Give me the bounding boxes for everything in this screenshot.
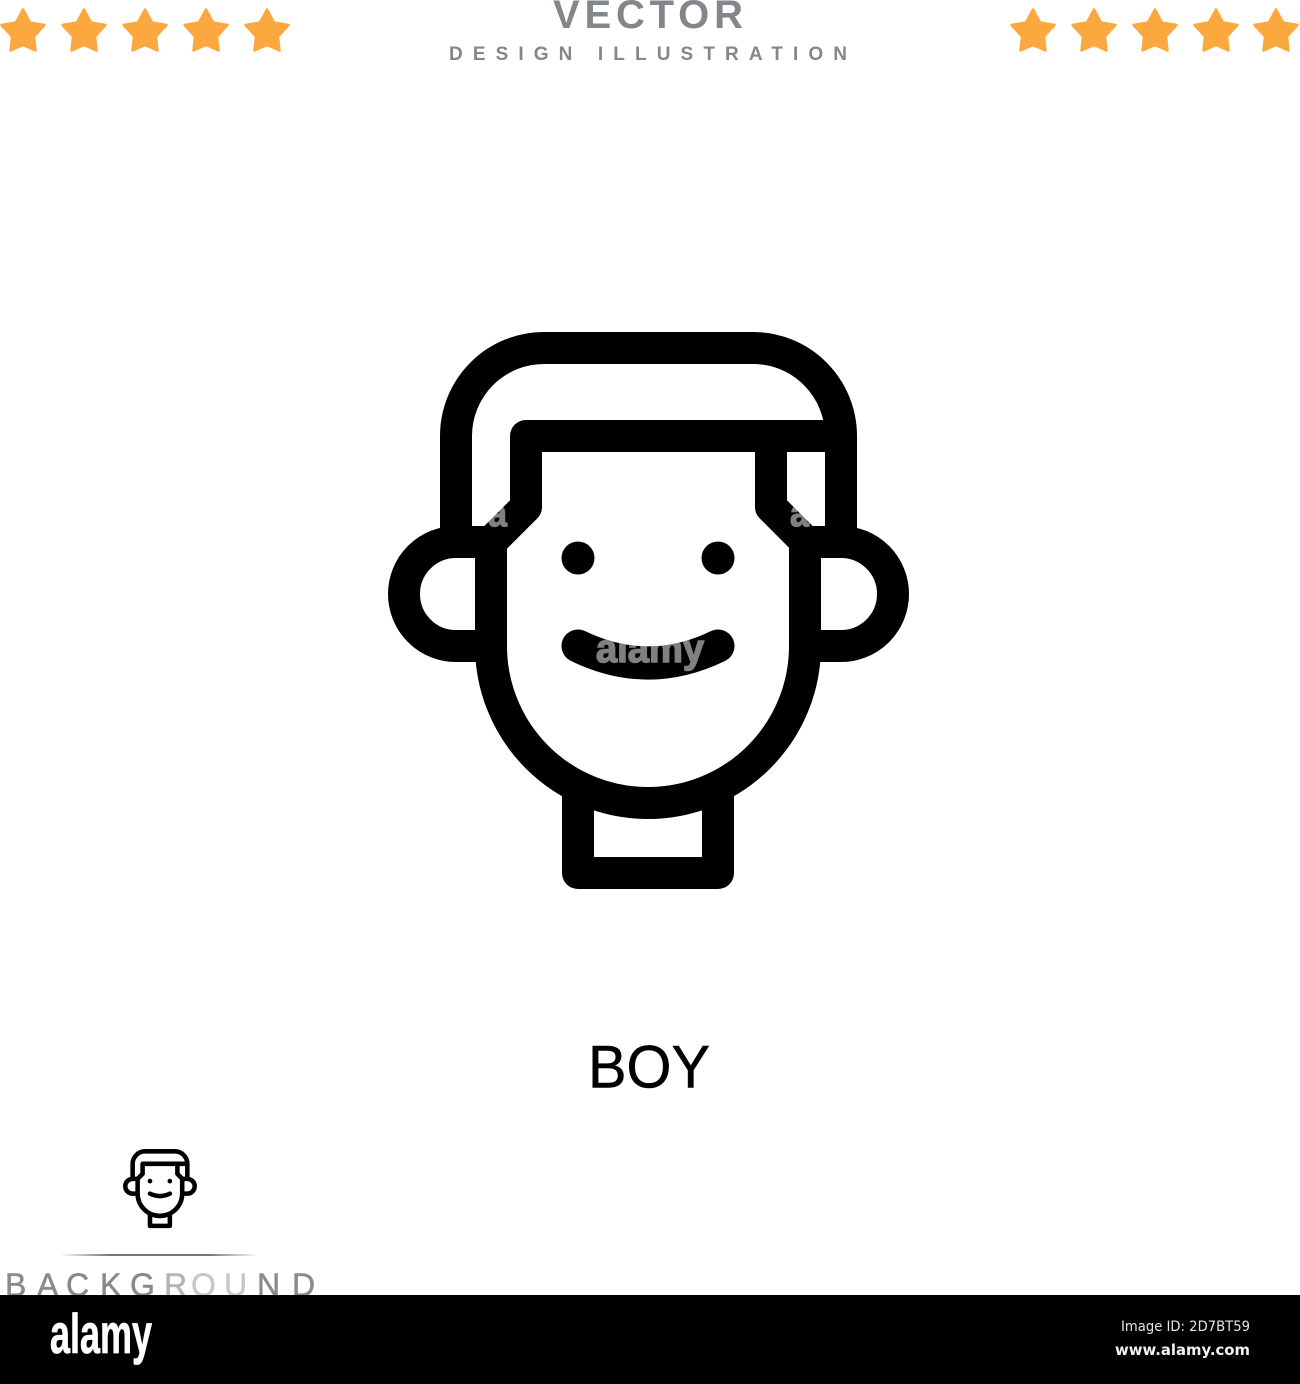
footer text: website: www.alamy.com	[1115, 1341, 1250, 1359]
right eye	[702, 542, 734, 574]
divider line	[60, 1254, 258, 1256]
footer bar	[0, 1295, 1300, 1384]
icon: boy face, small	[125, 1151, 195, 1226]
left ear	[404, 542, 491, 646]
watermark: letter a at right fringe: a	[790, 493, 810, 535]
stars: top right rating	[1012, 10, 1298, 50]
left eye	[562, 542, 594, 574]
face outline	[491, 540, 805, 803]
footer logo: alamy: alamy	[50, 1302, 152, 1365]
watermark: alamy over smile: alamy	[596, 627, 705, 671]
neck	[578, 787, 718, 873]
icon title: BOY: BOY	[588, 1034, 710, 1100]
icon: boy face, large	[404, 348, 893, 873]
right ear	[805, 542, 893, 646]
hair outline	[456, 348, 841, 530]
stars: top left rating	[2, 10, 288, 50]
hair fringe	[491, 436, 841, 542]
smile	[578, 646, 718, 663]
footer text: image ID: Image ID: 2D7BT59	[1121, 1319, 1250, 1335]
label: BACKGROUND: BACKG ROU ND	[5, 1267, 315, 1303]
watermark: letter a at left fringe: a	[488, 493, 508, 535]
subheading: DESIGN ILLUSTRATION: DESIGN ILLUSTRATION	[449, 44, 847, 65]
